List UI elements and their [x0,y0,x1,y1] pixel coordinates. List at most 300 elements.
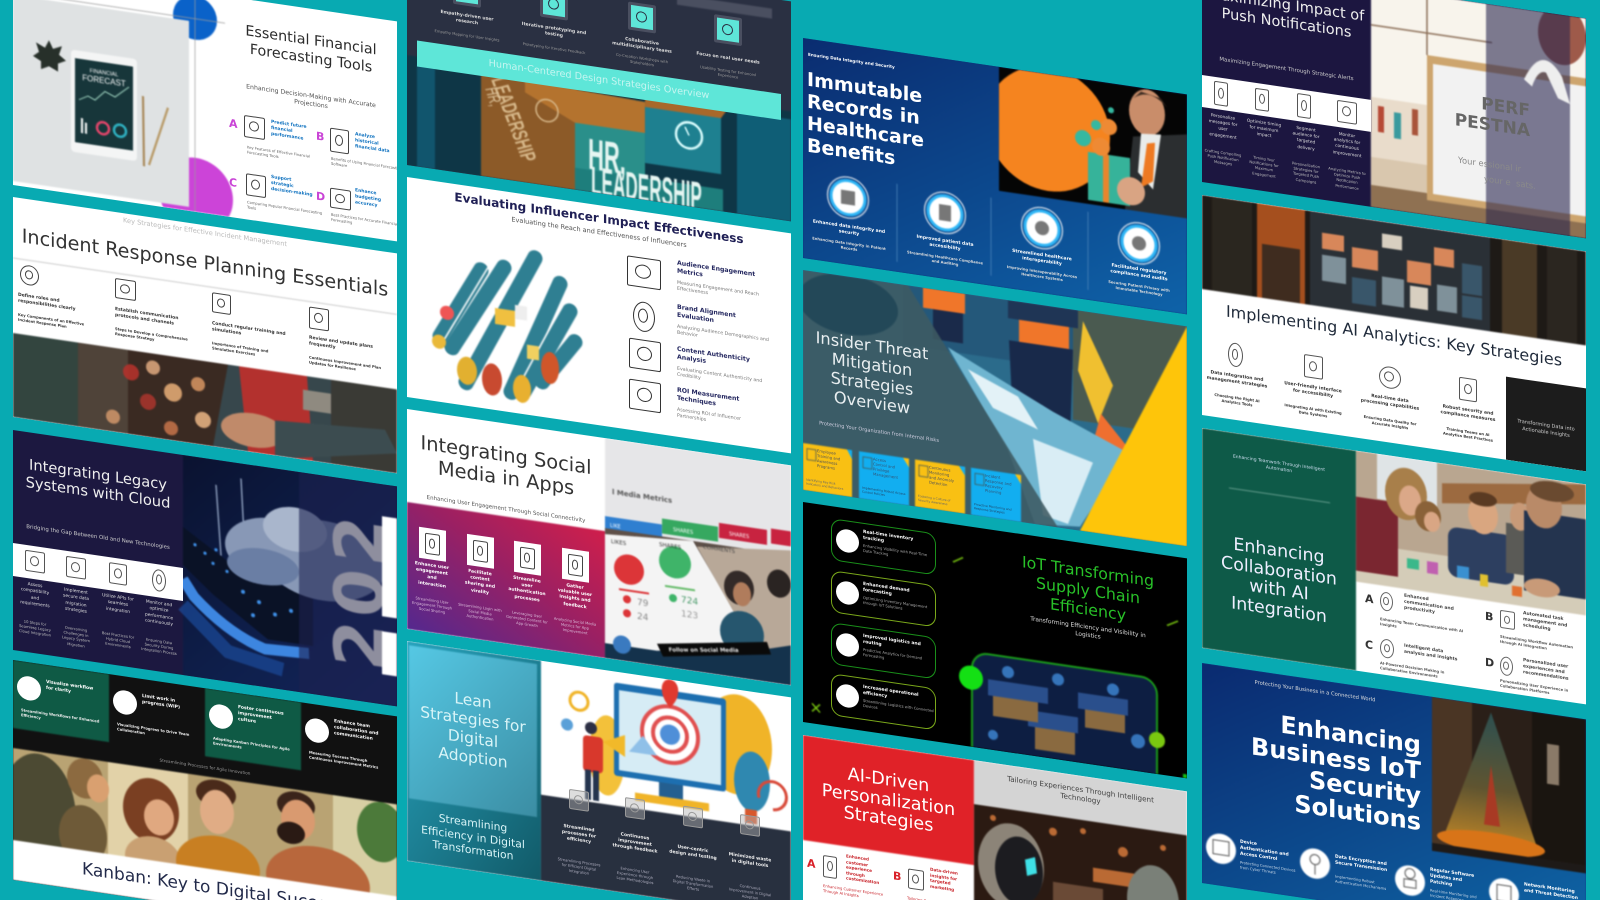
icon B [1500,610,1515,630]
item A note: Forecasting Tools [247,151,279,159]
item 2: sharing and [465,581,495,590]
heading: Incident Response Planning Essentials [22,224,388,301]
panel: Enhancing Business IoT Security Solutions slide [1202,663,1586,900]
teal title band [417,40,781,120]
step 4 text: analytics for [1334,138,1360,146]
card text: routing [863,640,882,648]
item 4: Focus on real user needs [696,52,760,66]
step 4 text [1326,130,1368,161]
sign caption [1458,153,1536,194]
card text: Enhanced demand [863,582,910,594]
tile 2: Control and [873,461,895,470]
step 2 text [63,587,89,615]
image: tablet with financial forecast on desk: FORECAST [82,73,126,89]
image: social media metrics dashboard: LIKES [611,539,627,547]
item B text: financial data [355,145,390,155]
tile 3: Detection [929,480,947,487]
item D letter: D [316,190,325,204]
step 4: Robust security and [1443,404,1493,417]
item B text [355,132,390,155]
step 3 text: targeted [1297,138,1315,146]
tile 4 [985,473,1012,497]
image: social media metrics dashboard: 123 [681,609,698,622]
panel: Human-Centered Design Strategies slide [407,0,791,221]
item 1 text [1240,840,1289,865]
item C text [1404,644,1457,664]
item 2 [457,567,503,599]
card 4 note: Continuous Improvement Metrics [309,756,378,770]
metric 3 [677,346,750,372]
card 2 note: Collaboration [117,727,145,736]
item C text: analysis and insights [1404,650,1457,663]
card 3 heading [238,704,284,725]
step 2 note: Overcoming [65,626,87,633]
tile 4: Planning [985,488,1001,495]
item A text: productivity [1404,606,1435,616]
step 4 text: continuous [1335,144,1359,152]
metric 1 note [677,281,759,305]
item 2 note: Authentication [466,614,494,622]
item D text: experiences and [1523,664,1565,675]
icon: define roles [20,264,39,287]
tile 4: Recovery [985,483,1003,490]
heading: Media in Apps [438,457,574,500]
subtitle: Technology [1060,791,1101,806]
panel: Kanban Key to Digital Success slide [13,660,397,900]
icon 4 [740,814,760,837]
image: HR leadership wooden cubes: HR, [480,86,505,108]
icon: D [330,188,351,211]
step 3 note [102,631,134,650]
card text [863,634,921,655]
item 4 note [552,616,598,639]
item 3: user [521,583,533,590]
item 3 note: Stakeholders [630,60,654,67]
card text [863,530,913,550]
icon: review [309,306,329,331]
tile 4 note: Response Strategies [974,506,1005,515]
item 4: feedback [563,602,587,610]
image: workers reviewing documents [803,270,1187,546]
item 1 note: Empathy Mapping for User Insights [435,29,499,43]
step 3 text: audience for [1293,132,1319,140]
card note: Data Tracking [863,549,888,557]
step 4 note: Security During [145,643,173,651]
item 3 [602,34,682,58]
step 1: management strategies [1207,376,1267,390]
step 1 note: Cloud Integration [19,629,51,638]
heading: Healthcare [807,113,924,152]
item A text: through [846,870,865,878]
item A text: customer [846,859,868,867]
tile 2 [873,456,898,480]
item 2 note: Social Media [468,609,492,617]
heading: Adoption [438,744,508,772]
step 3 text: integration [106,606,130,615]
panel: Enhancing Collaboration with AI Integration slide [1202,428,1586,704]
metric 1: Audience Engagement [677,260,755,278]
item 3 note [602,51,682,73]
step 3 text: seamless [108,600,128,608]
item 3 [504,574,550,606]
item B text: Analyze [355,132,375,140]
item 3 note: Generated Content for [506,615,548,625]
step 4 text: optimize [150,606,168,614]
icon: cart 2 [629,379,661,413]
icon B [908,868,924,891]
panel: Lean Strategies for Digital Adoption slide [407,641,791,900]
step 2 text: Establish communication [115,307,178,321]
item C text: Support [271,175,291,183]
sign caption: Your essional ir [1458,155,1521,174]
metric 1 note: Measuring Engagement and Reach [677,281,759,298]
item 2 text [1335,855,1387,875]
item 4 note [688,63,768,85]
item B text: Automated task [1523,611,1564,622]
step 2 note: Integrating AI with Existing [1284,403,1342,416]
item B text: targeted [930,878,951,886]
item 1: security [839,229,859,237]
item D note: Collaboration Platforms [1500,684,1549,695]
metric 2: Brand Alignment [677,304,736,319]
card 2 note: Visualizing Progress to Drive Team [117,722,189,737]
step 4 text: continuously [145,619,173,628]
icon A [1380,591,1393,612]
item A text: Enhanced [1404,594,1429,602]
item 4: compliance and audits [1110,269,1168,283]
item 4: insights and [559,595,591,604]
item A text: customization [846,876,879,886]
icon: brand [633,300,655,333]
item C text: strategic [271,181,294,189]
step 4 text: Monitor and [146,600,172,608]
step 1 note: for Efficient Digital [562,863,596,872]
card 1 heading: for clarity [46,686,71,695]
step 3 note: Importance of Training and [212,341,268,354]
step 4 note: Analyzing Metrics to [1328,167,1366,176]
item A letter: A [1365,592,1374,606]
step 1 note [1202,391,1272,412]
item 2: content [470,575,490,583]
white circle icon 3 [209,703,233,730]
step 2 [605,830,665,858]
heading: IoT Transforming [1022,552,1154,591]
step 4 note: Updates for Resilience [309,361,356,372]
item B note [1500,635,1573,656]
tile 1: Programs [817,463,835,471]
image: social media metrics dashboard: 24 [637,612,649,624]
item B text: scheduling [1523,624,1551,633]
step 1 text: compatibility [21,588,49,597]
card text: efficiency [863,691,887,700]
subheading: Streamlining [439,812,507,835]
icon tile 2 [467,534,494,569]
item D text: recommendations [1523,671,1569,682]
step 1 text [20,582,50,610]
item A note: Insights [1380,622,1397,629]
card text [863,685,919,705]
tile 3: Monitoring [929,470,949,478]
step 2 text [1243,118,1285,143]
step 3 text: Utilize APIs for [102,593,134,603]
icon circle [836,632,859,658]
item 2: accessibility [929,243,961,252]
step 3 note: Environments [105,642,131,650]
step 4 text: Monitor [1339,132,1355,140]
item 1 note: Streamlining User [415,596,448,605]
heading: Solutions [1294,790,1421,836]
item C letter: C [1365,638,1373,652]
item 4 text: Network Monitoring [1524,882,1575,895]
step 4 note: Continuous [740,884,760,891]
step 4 [720,851,780,872]
item D note [1500,679,1568,699]
step 1 note: Integration [569,869,589,876]
tile 1 note: Identifying Key Risk [806,477,836,486]
item 4 note: Immutable Technology [1116,286,1162,297]
heading: Records in [807,91,920,129]
step 2 [1278,380,1348,403]
step 3 note: Strategies for [1293,167,1319,174]
tile 2: Management [873,471,898,480]
tile 1: Training and [817,453,840,461]
tile 2 note: Implementing Robust Access [862,486,905,496]
icon C [1380,638,1394,659]
metric 3: Content Authenticity [677,346,750,363]
heading: Integrating Legacy [29,456,167,494]
icon: C [246,173,266,198]
item C letter: C [229,176,237,190]
step 1 text [1202,112,1244,143]
item 1 text: Access Control [1240,852,1277,862]
step 4 note: Continuous Improvement and Plan [309,355,381,370]
white icon band [1202,75,1371,132]
step 1 text [18,292,76,312]
step 1 [549,822,609,849]
item 1: Enhance user [415,561,449,571]
heading: Benefits [807,135,895,170]
card note: Predictive Analytics for Demand [863,648,922,661]
item 2 [899,232,991,258]
subheading: Transformation [432,838,514,863]
panel: AI-Driven Personalization Strategies slide [803,735,1187,900]
icon: compatibility [25,550,45,574]
step 3: User-centric [678,845,708,854]
card 2 heading: Limit work in [142,694,175,704]
item B text [1523,611,1567,636]
step 4 text: performance [145,612,173,621]
icon: prototyping [540,0,568,21]
tile 3 [929,465,954,488]
step 2 note: Enhancing User [621,866,649,875]
icon: phone [1214,81,1228,107]
item 3: authentication [508,587,546,598]
step 4 text [145,599,173,628]
step 2 text: for maximum [1250,125,1278,134]
step 2 note: Steps to Develop a Comprehensive [115,327,188,342]
sign text: PESTNA [1455,110,1530,141]
step 3 text [1285,124,1327,155]
step 3 [1355,391,1425,414]
panel: Immutable Records in Healthcare Benefits slide [803,38,1187,314]
item 1 note: Protecting Connected Devices [1240,861,1295,873]
step 3: Real-time data [1371,394,1409,404]
item A text: communication and [1404,600,1454,612]
step 2 note: Data Systems [1299,410,1327,419]
item 1: interaction [418,580,446,589]
image: tablet with financial forecast on desk: FINANCIAL [90,68,118,78]
panel: Integrating Social Media in Apps slide [407,409,791,685]
card 3 note: Environments [213,742,242,750]
item A text [846,853,879,886]
step 1 text: requirements [20,600,50,610]
step 2 note: Lean Methodologies [617,876,653,886]
heading: Mitigation [832,349,912,380]
step 2 note: Notifications for [1249,160,1279,168]
item 2 [514,21,594,45]
heading: Overview [834,388,910,418]
item C note: AI-Powered Decision Making in [1380,661,1444,675]
panel: Insider Threat Mitigation slide [803,270,1187,546]
card note [863,699,934,720]
card 3 [831,622,936,680]
card 3 heading: Foster continuous [238,705,284,717]
heading: Lean [454,689,492,712]
step 3 text: delivery [1297,145,1315,152]
item 1 [803,218,895,244]
step 1 text: Personalize [1211,113,1235,122]
tile 1 [817,448,840,471]
heading: Push Notifications [1222,6,1351,41]
item A letter: A [229,117,238,131]
image: social media metrics dashboard: SHARES [729,531,749,540]
item 2 note: Implementing Robust [1335,875,1375,884]
item A text [271,120,307,142]
item 2 note: Prototyping for Iterative Feedback [523,42,585,55]
step 1 text: user [1218,127,1228,133]
step 1 note: Push Notification [1207,154,1239,163]
item A note: Key Features of Effective Financial [247,145,310,159]
chart: diagonal pill illustration [407,177,791,453]
step 1 note: Choosing the Right AI [1214,393,1260,403]
subtitle: Tailoring Experiences Through Intelligent [1007,774,1154,805]
item B letter: B [1485,610,1493,624]
panel: Integrating Legacy Systems with Cloud slide [13,430,397,706]
icon: timing [1255,88,1269,112]
metric 4 note: Assessing ROI of Influencer [677,408,741,422]
step 3 note: Targeted Push [1293,172,1319,180]
step 1 note: Seamless Legacy [19,624,51,633]
item A letter: A [807,857,816,871]
step 3 note: Efforts [687,887,699,892]
item 2: Improved patient data [916,235,974,248]
icon 4 [1459,377,1477,402]
item 1 note [1240,861,1295,879]
item 2: Iterative prototyping and [522,22,586,36]
heading [1202,0,1371,45]
subtitle: Protecting Your Organization from Internal Risks [819,420,939,444]
card note: through IoT Solutions [863,601,902,611]
step 3 note: Campaigns [1296,177,1316,184]
step 2 note: Timing Your [1253,156,1275,163]
card text: Increased operational [863,685,919,698]
item A text [1404,594,1454,620]
step 3 text: Segment [1296,126,1316,134]
heading [1202,531,1356,632]
step 2: for accessibility [1293,389,1333,399]
step 2 note: Maximum [1255,166,1273,173]
step 4 note: Optimize Push [1334,173,1360,180]
item 3 note: Leveraging User [512,610,542,619]
white icon band [13,543,183,601]
heading: Forecasting Tools [250,42,372,76]
item 3 note: Improving Interoperability Across [1007,265,1077,279]
item D note: Best Practices for Accurate Financial [331,213,397,227]
item 2 note: Authentication Mechanisms [1335,880,1386,891]
item 1: and [427,575,437,582]
item 4 note [1093,278,1185,302]
item 1 text: Device [1240,840,1257,847]
item D text [1523,658,1569,683]
step 4 note [720,881,780,900]
card text: Real-time inventory [863,530,913,542]
card 3 heading: improvement [238,711,272,721]
image: illuminated data blocks [1202,195,1586,471]
tile 3 note [918,494,950,507]
item 4: valuable user [558,588,592,598]
card text: forecasting [863,588,892,597]
icon: training [212,292,231,315]
image: businessman with gift and orange circle [803,38,1187,314]
item 4 text [1524,882,1578,900]
icon 3 [1379,365,1401,390]
icon circle [836,683,859,709]
step 4 [1433,403,1503,426]
tile 1: Awareness [817,458,837,466]
image: social media metrics dashboard [407,409,791,685]
card 1 [831,518,936,576]
step 1: Streamlined [564,824,594,834]
item A text: performance [271,132,303,142]
metric 1: Metrics [677,268,703,278]
icon: APIs [109,562,127,586]
image: social media metrics dashboard: LIKE [610,523,621,530]
item A note: Through AI Insights [823,889,859,898]
step 1 note [1202,148,1244,170]
item 1 note [409,595,455,618]
step 3 [663,843,723,864]
item B text: Data-driven [930,867,958,876]
item 3 text: Regular Software [1430,868,1474,879]
item 3 [996,246,1088,272]
step 2 note: Challenges in [64,631,88,638]
card 1 note: Streamlining Workflows for Enhanced [21,708,99,724]
step 3 text: Conduct regular training and [212,321,286,337]
image: social media metrics dashboard: 79 [637,598,649,610]
tile 2 note: Control Policies [862,490,885,497]
kicker: Ensuring Data Integrity and Security [808,52,895,69]
item 1 note: Enhancing Data Integrity in Patient [812,236,886,251]
icon: audience [627,255,661,290]
tile 3: Continuous [929,465,950,473]
panel: Incident Response Planning Essentials slide [13,197,397,473]
step 1 text: responsibilities clearly [18,299,76,312]
image: HR leadership wooden cubes: HR, [588,129,626,184]
item 2 note [899,249,991,273]
card 3 note: Adapting Kanban Principles for Agile [213,736,290,752]
item 2 note: Streamlining Healthcare Compliance [907,250,983,265]
image: performance sign in cafe [1202,0,1586,238]
